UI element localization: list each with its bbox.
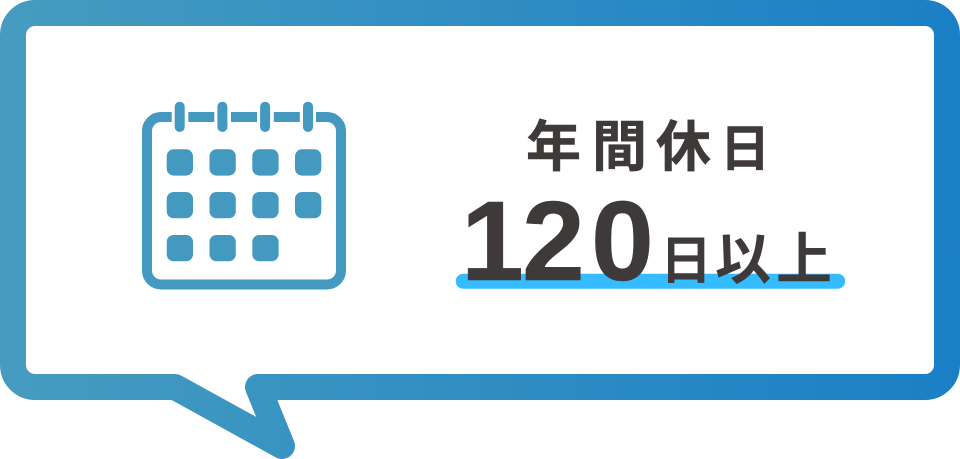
heading: annual holidays: 年 bbox=[526, 116, 581, 178]
unit text: 以 bbox=[715, 228, 771, 291]
heading: annual holidays: 休 bbox=[656, 116, 711, 178]
calendar binder rings bbox=[175, 102, 313, 132]
figure: 120 days or more bbox=[461, 178, 832, 304]
icon: calendar bbox=[147, 102, 341, 284]
unit text: 上 bbox=[776, 228, 832, 291]
calendar body bbox=[147, 117, 341, 284]
heading: annual holidays: 日 bbox=[720, 121, 770, 177]
underline highlight bbox=[456, 274, 845, 289]
calendar day squares bbox=[167, 149, 321, 261]
number 120: 120 bbox=[461, 178, 654, 304]
unit text: 日 bbox=[660, 233, 712, 291]
heading: annual holidays: 間 bbox=[592, 116, 647, 178]
